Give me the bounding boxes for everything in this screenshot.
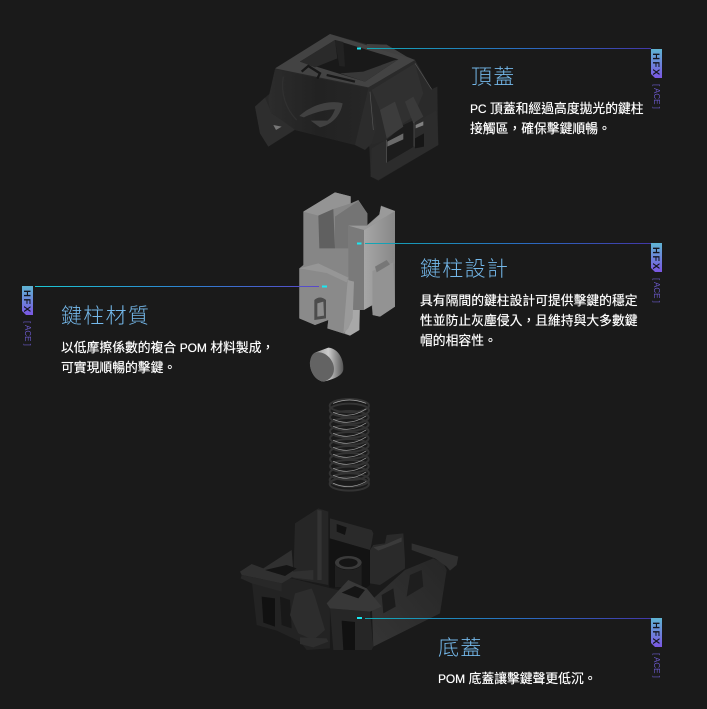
- text: stem material description: [61, 340, 274, 375]
- slider disc illustration: [310, 348, 343, 382]
- text: top housing description: PC 頂蓋和經過高度拋光的鍵柱: [470, 101, 644, 116]
- badge: HFX ACE stem material: [21, 286, 33, 346]
- text: bottom housing description: POM 底蓋讓擊鍵聲更低沉。: [438, 671, 597, 686]
- leader line: top housing: [357, 48, 651, 50]
- badge: HFX ACE top: HFX: [650, 53, 661, 77]
- badge: HFX ACE bottom: [ ACE ]: [652, 653, 661, 678]
- badge: HFX ACE bottom: [650, 618, 662, 678]
- spring illustration: [330, 399, 369, 491]
- text: top housing description: 接觸區，確保擊鍵順暢。: [470, 121, 611, 136]
- text: stem design description: 具有隔間的鍵柱設計可提供擊鍵的穩定: [420, 293, 638, 308]
- leader line: bottom housing: [357, 617, 651, 619]
- stem illustration: [299, 192, 395, 336]
- badge: HFX ACE stem design: HFX: [650, 247, 661, 271]
- heading: stem design: 鍵柱設計: [420, 258, 509, 281]
- badge: HFX ACE stem design: [650, 243, 662, 303]
- text: stem design description: 性並防止灰塵侵入，且維持與大多數鍵: [420, 313, 638, 328]
- badge: HFX ACE stem design: [ ACE ]: [652, 278, 661, 303]
- text: stem design description: 帽的相容性。: [420, 333, 497, 348]
- text: stem design description: [420, 293, 638, 348]
- text: stem material description: 以低摩擦係數的複合 POM 材料製成，: [61, 340, 274, 355]
- text: top housing description: [470, 101, 644, 136]
- badge: HFX ACE top: [650, 49, 662, 109]
- leader line: stem design: [357, 242, 651, 244]
- badge: HFX ACE stem material: HFX: [21, 290, 32, 314]
- heading: bottom housing: 底蓋: [438, 637, 483, 660]
- badge: HFX ACE top: [ ACE ]: [652, 84, 661, 109]
- heading: top housing: 頂蓋: [471, 66, 516, 89]
- heading: stem material: 鍵柱材質: [61, 305, 150, 328]
- badge: HFX ACE stem material: [ ACE ]: [23, 321, 32, 346]
- badge: HFX ACE bottom: HFX: [650, 622, 661, 646]
- text: stem material description: 可實現順暢的擊鍵。: [61, 360, 176, 375]
- top housing illustration: [255, 34, 438, 181]
- leader line: stem material: [35, 286, 327, 288]
- bottom housing illustration: [240, 508, 458, 650]
